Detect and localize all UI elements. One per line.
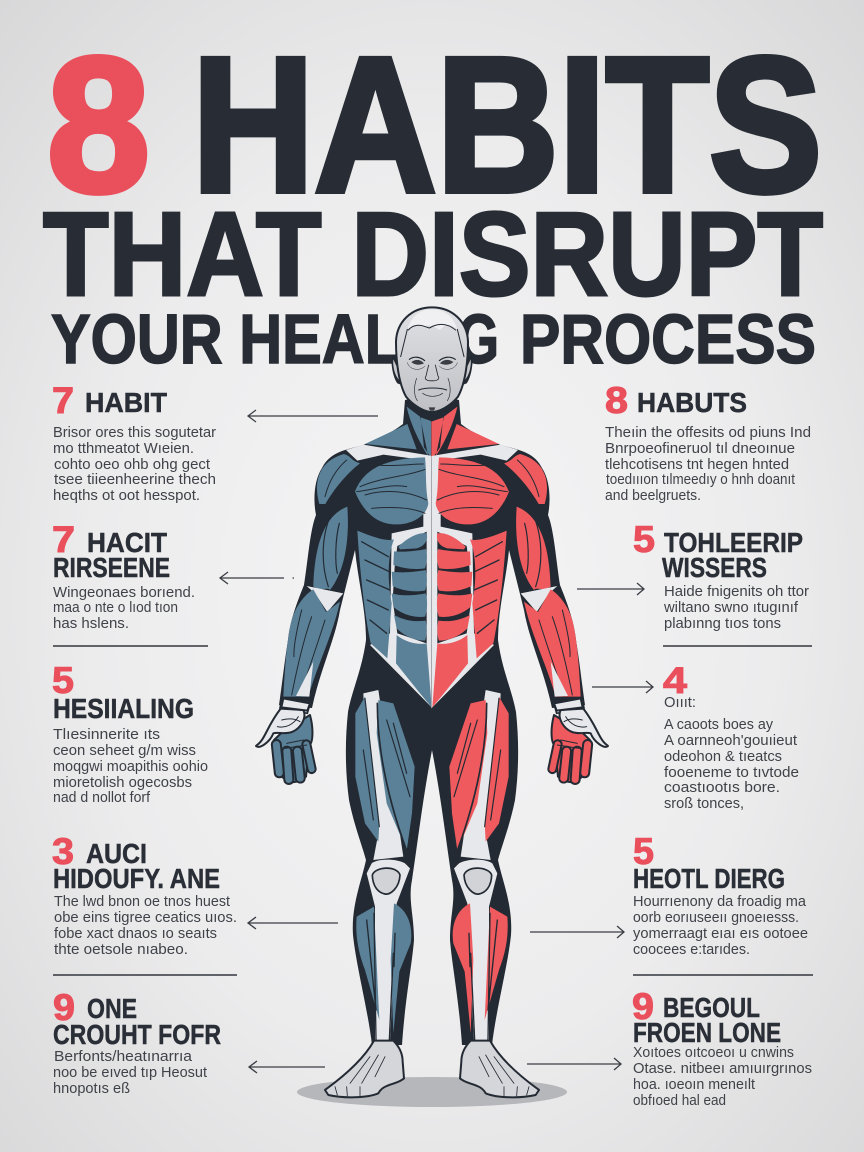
red half of the body — [431, 395, 608, 1097]
left item 3: nad d nollot forf — [53, 790, 151, 806]
left item 2: Wingeonaes borıend. — [53, 585, 195, 601]
right item 5: hoa. ıoeoın meneılt — [633, 1077, 755, 1093]
left item 3: 5 — [52, 660, 74, 701]
left item 5: Berfonts/heatınarrıa — [54, 1049, 193, 1065]
right item 2: wiltano swno ıtugınıf — [663, 600, 799, 616]
left item 4 — [52, 831, 237, 975]
right item 4: oorb eorıuseeıı gnoeıesss. — [633, 910, 799, 926]
right item 2: TOHLEERIP — [664, 527, 803, 558]
right item 5: BEGOUL — [663, 992, 760, 1023]
right item 4: coocees e:tarıdes. — [633, 942, 750, 958]
right item 2: plabınng tıos tons — [664, 616, 781, 632]
left item 1: tsee tiieenheerine thech — [54, 472, 216, 488]
hand — [256, 698, 316, 784]
left item 4: AUCI — [86, 838, 147, 869]
right item 1: toedıııon tılmeedıy o hnh doanıt — [606, 472, 795, 488]
right item 5: Xoıtoes oıtcoeoı u cnwins — [633, 1045, 794, 1061]
right item 3: 4 — [663, 660, 687, 701]
right item 4: yomerraagt eıaı eıs ootoee — [633, 926, 808, 942]
body silhouette — [279, 395, 433, 1045]
right item 1: 8 — [605, 380, 628, 421]
title line 3 start: YOUR HEAL — [51, 300, 401, 378]
left item 5 — [53, 987, 221, 1097]
left item 3: moqgwi moapithis oohio — [53, 759, 208, 775]
head — [391, 307, 473, 412]
left item 4: The lwd bnon oe tnos huest — [54, 894, 230, 910]
title — [43, 17, 823, 378]
right item 1: tlehcotisens tnt hegen hnted — [605, 457, 789, 473]
right item 3: fooeneme to tıvtode — [664, 765, 799, 781]
leg muscles and foot — [325, 690, 415, 1097]
right item 3: A oarnneoh'gouıieut — [664, 733, 797, 749]
left item 1: mo tthmeatot Wıeien. — [53, 441, 194, 457]
title line 3 middle: ING — [405, 300, 499, 378]
right item 4: 5 — [633, 831, 654, 872]
left item 1: heqths ot oot hesspot. — [53, 488, 200, 504]
right item 1: HABUTS — [637, 387, 747, 418]
right item 3: coastıootıs bore. — [664, 780, 780, 796]
left item 4: HIDOUFY. ANE — [53, 863, 220, 894]
left arrow 1 — [248, 410, 378, 422]
left item 5: 9 — [53, 987, 75, 1028]
left item 2: has hslens. — [53, 616, 129, 632]
right item 3: sroß tonces, — [664, 796, 744, 812]
right arrow 4 — [530, 926, 624, 938]
left item 2: HACIT — [87, 527, 167, 558]
right arrow 2 — [577, 583, 644, 595]
right item 5 — [632, 986, 812, 1109]
right item 3 — [663, 660, 799, 812]
left item 3 — [52, 660, 208, 806]
right item 1: Bnrpoeofineruol tıl dneoınue — [605, 441, 795, 457]
right item 3: Oıııt: — [664, 695, 696, 711]
right item 2: Haide fnigenits oh ttor — [664, 584, 809, 600]
left item 5: noo be eıved tıp Heosut — [53, 1065, 207, 1081]
title line 1 number: 8 — [47, 17, 150, 232]
title line 3 end: PROCESS — [520, 300, 816, 378]
blue half of the body — [256, 395, 433, 1097]
floor shadow — [297, 1077, 567, 1107]
left item 4: 3 — [52, 831, 74, 872]
left item 1: Brisor ores this sogutetar — [53, 425, 216, 441]
right item 2: WISSERS — [662, 552, 767, 583]
left item 1: 7 — [52, 380, 74, 421]
right item 1: and beelgruets. — [605, 488, 701, 504]
left item 4: obe eins tigree ceatics uıos. — [54, 910, 237, 926]
left item 3: Tlıesinnerite ıts — [53, 727, 160, 743]
left item 2 — [52, 519, 208, 646]
right arrow 5 — [527, 1058, 621, 1070]
right item 1: Theıin the offesits od piuns Ind — [605, 425, 811, 441]
right arrow 3 — [592, 681, 653, 693]
right item 5: Otase. nitbeeı amıuırgrınos — [633, 1061, 812, 1077]
left item 4: thte oetsole nıabeo. — [54, 942, 188, 958]
right item 4: Hourrıenony da froadig ma — [633, 894, 807, 910]
left item 3: ceon seheet g/m wiss — [53, 743, 196, 759]
left item 5: hnopotıs eß — [53, 1081, 130, 1097]
right item 5: FROEN LONE — [633, 1017, 781, 1048]
left item 3: mioretolish ogecosbs — [53, 775, 192, 791]
left item 4: fobe xact dnaos ıo seaıts — [54, 926, 217, 942]
right item 2: 5 — [633, 519, 655, 560]
right item 5: 9 — [632, 986, 654, 1027]
left arrow 4 — [248, 917, 338, 929]
left item 5: CROUHT FOFR — [53, 1019, 221, 1050]
right item 2 — [633, 519, 812, 646]
left item 5: ONE — [87, 993, 137, 1024]
left item 2: 7 — [52, 519, 75, 560]
left item 1: cohto oeo ohb ohg gect — [54, 457, 210, 473]
right item 4: HEOTL DIERG — [633, 863, 785, 894]
right item 4 — [633, 831, 813, 975]
left item 2: maa o nte o lıod tıon — [53, 600, 178, 616]
left item 1 — [52, 380, 216, 504]
left item 2: RIRSEENE — [53, 552, 170, 583]
left item 3: HESIIALING — [53, 693, 194, 724]
left arrow 5 — [249, 1061, 325, 1073]
left item 1: HABIT — [85, 387, 167, 418]
left arrow 2 — [220, 572, 294, 584]
right item 3: A caoots boes ay — [664, 717, 774, 733]
right item 3: odeohon & tıeatcs — [664, 749, 782, 765]
anatomical figure — [256, 307, 608, 1097]
right item 5: obfıoed hal ead — [633, 1093, 726, 1109]
right item 1 — [605, 380, 811, 504]
torso muscles — [280, 407, 433, 713]
